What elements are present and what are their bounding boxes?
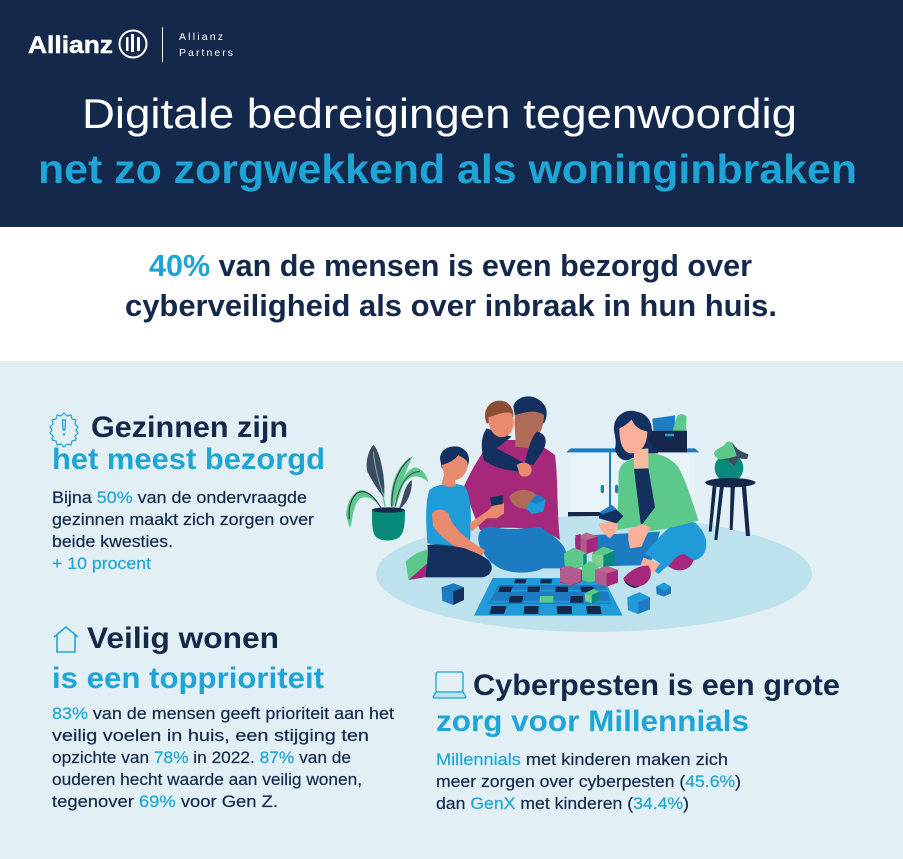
title line 1: Digitale bedreigingen tegenwoordig — [82, 90, 797, 137]
panel: header band — [0, 0, 903, 227]
panel: key statistic — [0, 227, 903, 361]
block: Veilig wonen — [52, 622, 394, 811]
icon: laptop — [433, 672, 466, 698]
heading: Veilig wonen — [87, 622, 279, 655]
logo: Allianz Partners: Allianz — [28, 32, 113, 59]
rug — [376, 516, 812, 632]
body text: meer zorgen over cyberpesten ( 45.6%) — [436, 773, 741, 791]
body text: beide kwesties. — [52, 533, 173, 551]
body text — [52, 705, 394, 811]
cabinet — [566, 414, 699, 523]
subheading: is een topprioriteit — [52, 662, 324, 695]
block: Gezinnen — [50, 411, 325, 573]
body text: gezinnen maakt zich zorgen over — [52, 511, 315, 529]
boy — [406, 446, 504, 580]
block: Cyberpesten — [433, 669, 840, 813]
plant left — [346, 445, 428, 540]
statistic line 1: 40% van de mensen is even bezorgd over — [149, 248, 752, 283]
body text: Millennials met kinderen maken zich — [436, 751, 728, 769]
statistic line 2: cyberveiligheid als over inbraak in hun huis. — [125, 288, 777, 323]
subheading: zorg voor Millennials — [436, 705, 749, 738]
body text: 83% van de mensen geeft prioriteit aan het — [52, 705, 394, 723]
body text: ouderen hecht waarde aan veilig wonen, — [52, 771, 362, 789]
game board — [474, 578, 623, 616]
illustration: family playing on rug — [346, 396, 812, 632]
body text: veilig voelen in huis, een stijging ten — [52, 727, 369, 745]
father — [464, 396, 567, 573]
panel: light background — [0, 361, 903, 859]
subheading: het meest bezorgd — [52, 443, 325, 476]
title line 2: net zo zorgwekkend als woninginbraken — [38, 146, 857, 192]
logo: Allianz Partners: Partners — [179, 47, 233, 59]
heading: Gezinnen zijn — [91, 411, 288, 444]
icon: warning badge — [50, 413, 78, 447]
heading: Cyberpesten is een grote — [473, 669, 840, 702]
body text: opzichte van 78% in 2022. 87% van de — [52, 749, 351, 767]
toy blocks — [560, 533, 671, 614]
body text: Bijna 50% van de ondervraagde — [52, 489, 307, 507]
logo: Allianz Partners — [28, 27, 233, 62]
child on father's back — [482, 401, 546, 477]
body text: + 10 procent — [52, 555, 151, 573]
body text: dan GenX met kinderen ( 34.4%) — [436, 795, 689, 813]
body text — [436, 751, 741, 813]
body text: tegenover 69% voor Gen Z. — [52, 793, 278, 811]
woman — [593, 411, 706, 588]
icon: house — [54, 627, 78, 652]
body text — [52, 489, 315, 573]
logo: Allianz Partners: Allianz — [179, 31, 223, 43]
plant on stool — [705, 441, 755, 540]
block in father's hand — [526, 494, 546, 514]
